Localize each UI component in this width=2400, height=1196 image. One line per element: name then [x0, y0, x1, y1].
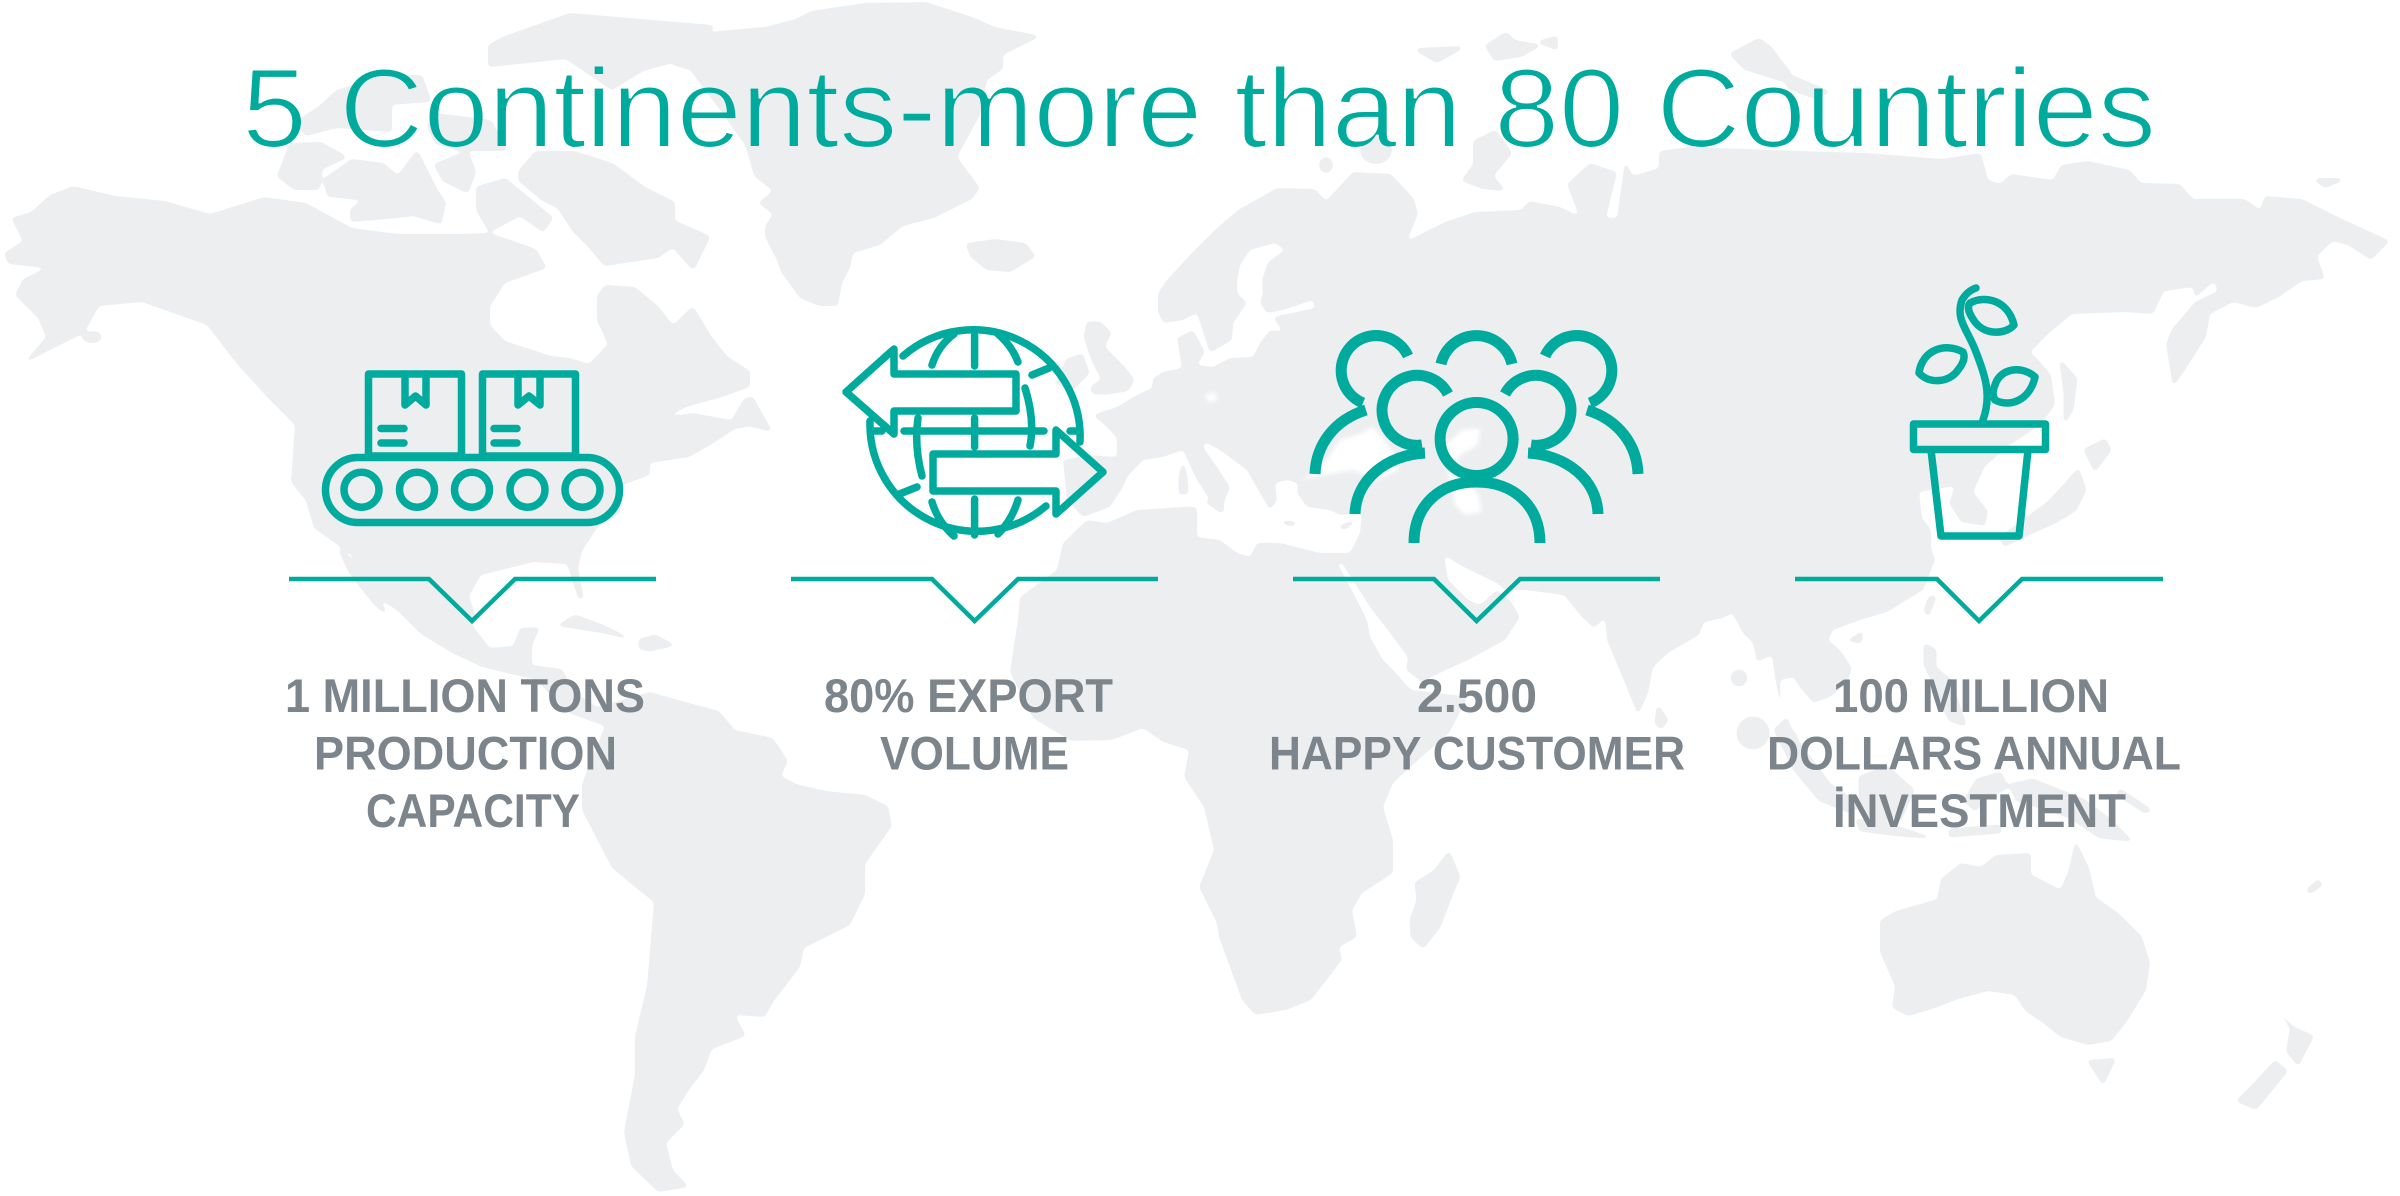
map: Eurasia and Africa [1010, 147, 2390, 1015]
map: Indonesia and New Guinea [1732, 671, 2150, 840]
map: Black Sea and Caspian Sea [1205, 392, 1482, 515]
divider: chevron 2 [791, 579, 1158, 621]
map: Arctic islands and Iceland [84, 15, 2340, 341]
icon: globe with import and export arrows [846, 330, 1103, 536]
divider: chevron 1 [289, 579, 656, 621]
text: annual investment: DOLLARS ANNUAL [1767, 726, 2181, 780]
text: happy customers [1269, 669, 1685, 780]
text: production capacity: PRODUCTION [314, 726, 617, 780]
text: happy customers: 2.500 [1417, 669, 1537, 722]
title: 5 Continents-more than 80 Countries [242, 46, 2156, 171]
map: Caribbean and Newfoundland [340, 398, 770, 650]
icon: boxes on conveyor belt [326, 374, 620, 522]
map: Britain, Ireland and Mediterranean islands [1057, 323, 1353, 528]
map: Madagascar and Sri Lanka [1411, 707, 1667, 947]
text: production capacity: CAPACITY [366, 784, 580, 837]
text: export volume: VOLUME [880, 726, 1069, 780]
icon: group of people [1315, 336, 1638, 543]
text: export volume: 80% EXPORT [824, 669, 1113, 722]
map: Greenland [672, 2, 1041, 306]
map: Australia and New Zealand [1881, 843, 2322, 1109]
text: annual investment: İNVESTMENT [1833, 784, 2126, 837]
text: production capacity [285, 669, 645, 837]
text: annual investment: 100 MILLION [1833, 669, 2109, 722]
text: production capacity: 1 MILLION TONS [285, 669, 645, 722]
divider: chevron 4 [1795, 579, 2163, 621]
text: export volume [824, 669, 1113, 780]
text: happy customers: HAPPY CUSTOMER [1269, 726, 1685, 780]
map: East Asian islands [1850, 362, 2110, 725]
divider: chevron 3 [1293, 579, 1660, 621]
text: annual investment [1767, 669, 2181, 837]
icon: potted plant [1914, 288, 2046, 536]
map: Americas [4, 186, 892, 1192]
